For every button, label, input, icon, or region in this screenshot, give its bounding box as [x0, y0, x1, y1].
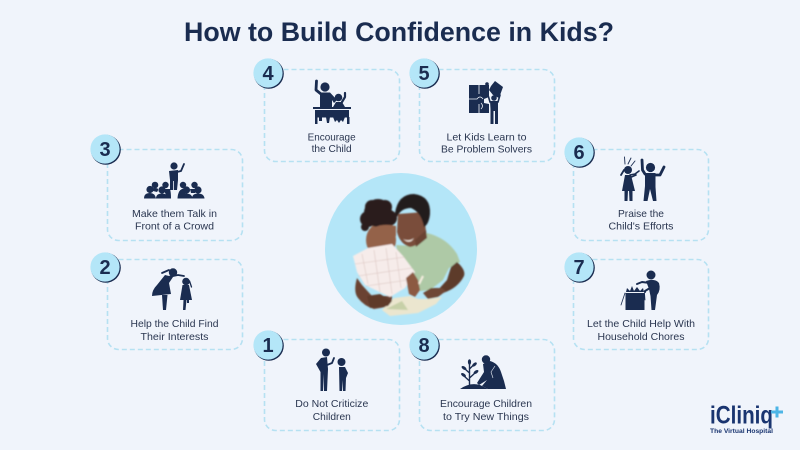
badge 2 — [90, 252, 121, 283]
panel: 3 Make them Talk in Front of a Crowd — [90, 134, 243, 240]
badge 6 — [564, 137, 595, 168]
panel: 7 Let the Child Help With Household Chores — [564, 252, 708, 350]
central photo: mother and child — [325, 173, 477, 325]
label: Make them Talk in — [132, 209, 217, 220]
label: Let the Child Help With — [587, 319, 695, 330]
woman's hand — [423, 288, 446, 299]
child's shirt — [353, 244, 415, 297]
woman's face — [397, 212, 426, 247]
label: Front of a Crowd — [135, 222, 214, 232]
panel: 6 Praise the Child's Efforts — [564, 137, 708, 240]
logo: iCliniq: The Virtual Hospital — [710, 429, 773, 435]
hand on paper — [367, 294, 392, 308]
panel: 4 Encourage the Child — [253, 58, 400, 162]
woman's shirt — [396, 233, 460, 291]
icon: speaker and crowd — [144, 162, 204, 198]
woman's arm — [437, 262, 464, 293]
child's hand — [406, 272, 420, 297]
label: Do Not Criticize — [295, 399, 369, 410]
label: Let Kids Learn to — [446, 132, 527, 144]
badge 2: 2 — [99, 257, 111, 279]
label: Praise the — [618, 209, 664, 220]
icon: kneeling figure planting a tree — [460, 355, 506, 389]
paper on table — [382, 296, 442, 316]
icon: child packing a box — [621, 270, 660, 310]
label — [295, 399, 369, 423]
label: Encourage — [308, 132, 356, 144]
label: the Child — [312, 144, 352, 155]
badge 4: 4 — [262, 63, 274, 85]
panel: 8 Encourage Children to Try New Things — [409, 330, 554, 430]
badge 8 — [409, 330, 440, 361]
icon: puzzle and person — [469, 81, 503, 124]
label: Their Interests — [140, 332, 208, 343]
badge 7 — [564, 252, 595, 283]
label — [587, 319, 695, 343]
badge 5: 5 — [418, 63, 430, 85]
badge 8: 8 — [418, 335, 430, 357]
badge 1 — [253, 330, 284, 361]
label: Encourage Children — [440, 399, 532, 410]
badge 1: 1 — [262, 335, 274, 357]
badge 7: 7 — [573, 257, 585, 279]
panel: 2 Help the Child Find Their Interests — [90, 252, 243, 350]
logo: iCliniq: iCliniq — [710, 402, 773, 430]
badge 5 — [409, 58, 440, 89]
label: Be Problem Solvers — [441, 144, 532, 156]
panel: 5 Let Kids Learn to Be Problem Solvers — [409, 58, 554, 162]
label — [130, 319, 219, 343]
icon: child with violin and cheering parent — [621, 157, 664, 201]
label — [132, 209, 217, 232]
label: Help the Child Find — [130, 319, 219, 330]
label — [608, 209, 674, 232]
label: Children — [313, 412, 351, 423]
woman's arm behind child — [355, 278, 392, 309]
badge 4 — [253, 58, 284, 89]
badge 3 — [90, 134, 121, 165]
label: Child's Efforts — [608, 222, 674, 232]
label: Household Chores — [598, 332, 684, 343]
title: How to Build Confidence in Kids? — [184, 17, 614, 47]
label: to Try New Things — [443, 412, 529, 423]
child's face — [365, 225, 397, 249]
badge 6: 6 — [573, 142, 585, 164]
label — [441, 132, 532, 156]
label — [308, 132, 356, 155]
panel: 1 Do Not Criticize Children — [253, 330, 400, 430]
icon: woman with child — [152, 268, 192, 310]
child's hair — [360, 199, 397, 231]
icon: adult scolding child — [316, 348, 348, 391]
icon: teacher and child at desk — [313, 81, 351, 124]
badge 3: 3 — [99, 139, 111, 161]
label — [440, 399, 532, 423]
